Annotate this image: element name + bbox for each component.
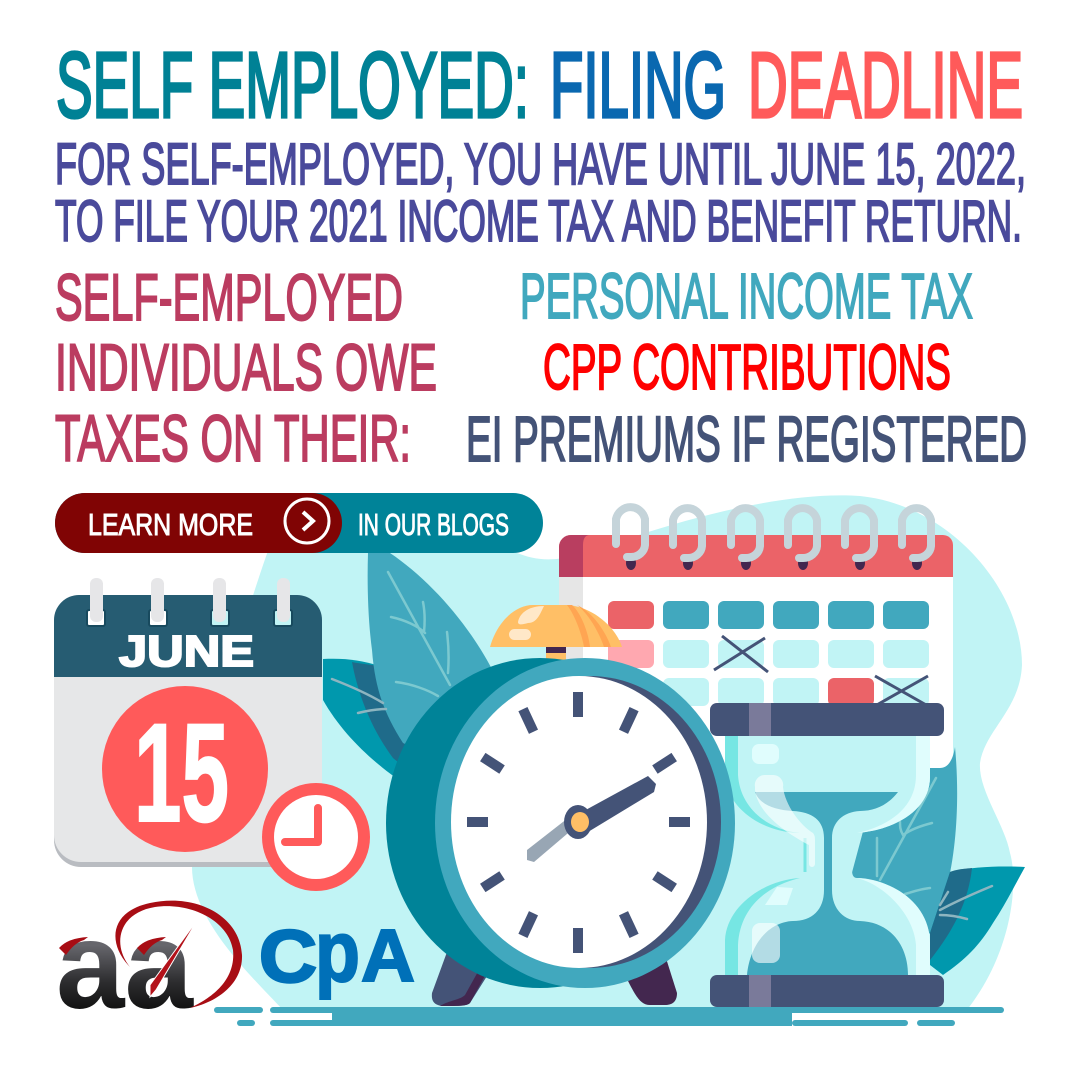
dial [451,676,707,968]
calendar rings [616,507,931,558]
subtitle text [55,132,1026,254]
wall calendar [559,507,953,768]
leaves right [850,747,1025,975]
button: learn more [55,493,543,553]
list of taxes [466,260,1027,475]
June calendar: JUNE [119,627,254,676]
button: learn more: IN OUR BLOGS [358,507,509,542]
glass [725,736,930,975]
heading: taxes owed [55,260,437,475]
heading: taxes owed: SELF-EMPLOYED [55,260,403,334]
button: learn more: LEARN MORE [88,507,253,542]
logo: CPA: C [259,915,317,998]
ground [214,1007,1004,1026]
hourglass [710,703,944,1007]
bell [490,605,622,660]
plate bottom [710,975,944,1007]
logo: aa: aa [56,897,194,1035]
feet [625,955,677,1005]
date cells [608,601,929,706]
heading: taxes owed: INDIVIDUALS OWE [55,330,437,404]
clock icon [262,783,370,891]
title: FILING [550,33,726,137]
logo: CPA [259,904,415,1000]
title: SELF EMPLOYED: [56,33,529,137]
background blob [192,495,1022,1010]
ticks [467,692,690,953]
logo: CPA: A [361,914,415,997]
June calendar: 15 [134,694,229,851]
hands [527,776,656,862]
body [386,658,694,988]
heading: taxes owed: TAXES ON THEIR: [55,401,411,475]
leaves left [323,553,495,790]
alarm clock [386,605,735,1006]
June calendar [54,578,322,867]
plate top [710,703,944,736]
logo: CPA: p [315,904,360,1000]
sand [747,792,908,975]
